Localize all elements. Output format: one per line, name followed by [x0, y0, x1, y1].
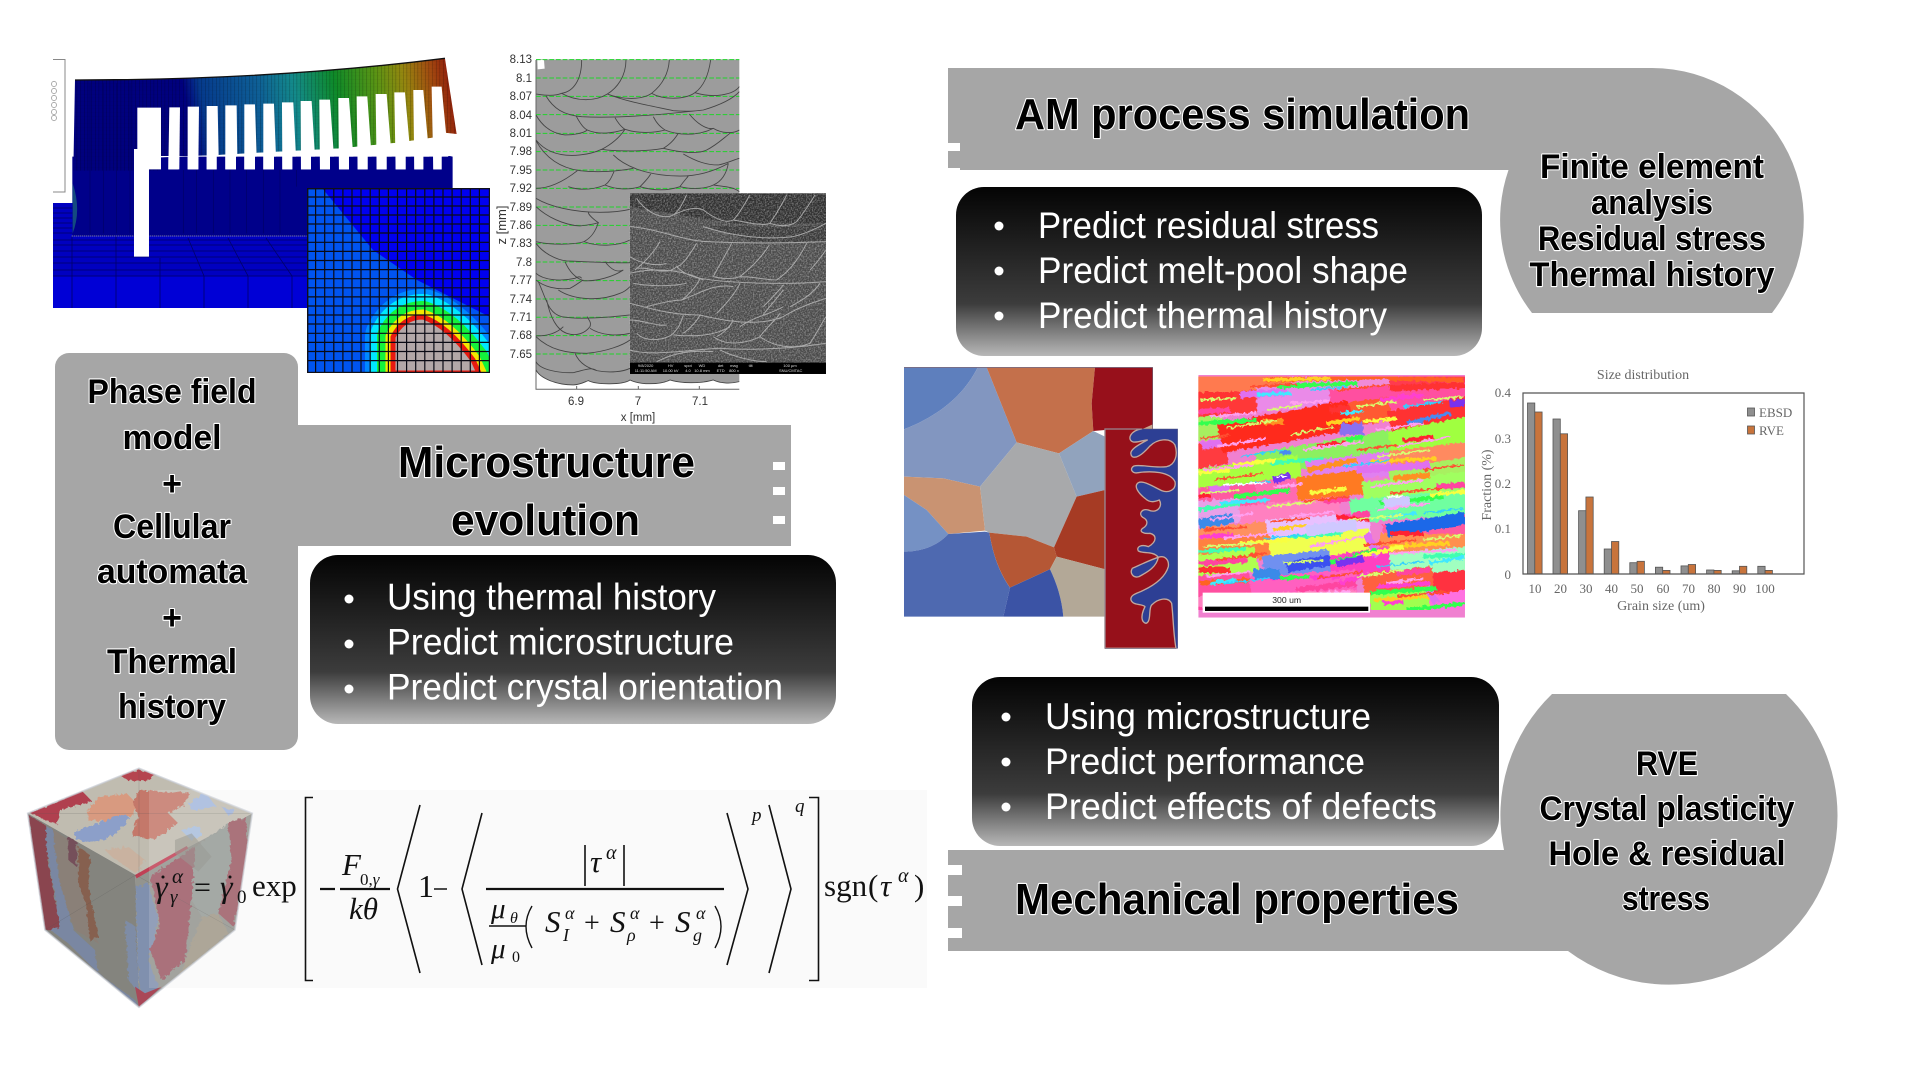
- axis titles: z [mm]: [494, 206, 509, 244]
- broad orientation regions: [1193, 378, 1470, 608]
- x axis labels: 100: [1755, 581, 1775, 596]
- x axis title: Grain size (um): [1617, 599, 1705, 614]
- chart title: Size distribution: [1597, 368, 1689, 383]
- SEM data bar: [630, 363, 826, 374]
- x axis labels: 10: [1528, 581, 1542, 596]
- equation: crystal plasticity flow rule: μ: [490, 893, 506, 925]
- axis titles: 7.1: [692, 396, 708, 408]
- SEM data bar: SNU/CMTAC: [779, 368, 802, 373]
- base plate: [53, 203, 309, 308]
- callout: AM process bullet list: [956, 187, 1482, 356]
- equation: crystal plasticity flow rule: +: [584, 908, 600, 939]
- icon: RVE cube: [28, 768, 252, 1007]
- topic list: Residual stress: [1538, 220, 1766, 258]
- callout: mechanical properties bullet list: Predict performance: [1045, 741, 1365, 782]
- axis tick labels: [510, 54, 533, 361]
- x axis labels: 90: [1733, 581, 1746, 596]
- legend: [1748, 405, 1792, 438]
- y axis labels: 0.1: [1495, 521, 1511, 536]
- x axis labels: 40: [1605, 581, 1618, 596]
- equation: crystal plasticity flow rule: S: [675, 904, 690, 939]
- equation: crystal plasticity flow rule: α: [172, 864, 184, 888]
- SEM data bar: spot: [684, 363, 693, 368]
- right face grains: [136, 817, 248, 1003]
- topic list: [1530, 148, 1775, 294]
- y axis title: Fraction (%): [1480, 449, 1495, 521]
- equation: crystal plasticity flow rule: α: [696, 903, 706, 923]
- equation: crystal plasticity flow rule: α: [898, 865, 909, 887]
- y axis labels: 0.3: [1495, 431, 1511, 446]
- chart: grain size distribution: [1480, 368, 1804, 614]
- left face grains: [28, 815, 139, 1007]
- x axis labels: 30: [1580, 581, 1592, 596]
- equation: crystal plasticity flow rule: 0,γ: [360, 870, 381, 889]
- panel: mechanical properties banner: [948, 694, 1838, 985]
- white slots: [134, 87, 459, 257]
- x axis labels: 50: [1630, 581, 1644, 596]
- axis tick labels: 7.92: [510, 183, 532, 195]
- axis tick labels: 8.07: [510, 91, 532, 103]
- SEM data bar: 11:11:50 AM: [635, 368, 657, 373]
- x axis labels: [1528, 581, 1775, 596]
- axis tick labels: 7.65: [510, 349, 532, 361]
- method list text: Thermal: [107, 643, 237, 681]
- equation: crystal plasticity flow rule: α: [606, 842, 617, 864]
- y axis labels: 0.2: [1495, 476, 1511, 491]
- axis titles: 7: [635, 396, 641, 408]
- SEM data bar: tilt: [749, 363, 754, 368]
- panel: AM process simulation banner: [948, 68, 1804, 313]
- heading: Mechanical properties: [1015, 875, 1459, 924]
- topic list: Finite element: [1540, 148, 1764, 186]
- callout: AM process bullet list: Predict residual stress: [1038, 205, 1379, 246]
- SEM data bar: det: [718, 363, 724, 368]
- equation: crystal plasticity flow rule: g: [693, 925, 702, 945]
- large brackets and chevrons: [306, 798, 818, 980]
- topic list: Hole & residual: [1548, 835, 1786, 873]
- SEM data bar: 100 µm: [783, 363, 797, 368]
- SEM data bar: 10.8 mm: [694, 368, 710, 373]
- equation: crystal plasticity flow rule: α: [565, 903, 575, 923]
- panel: EBSD orientation map: [1193, 375, 1470, 618]
- callout: mechanical properties bullet list: Using microstructure: [1045, 696, 1371, 737]
- callout: mechanical properties bullet list: Predict effects of defects: [1045, 786, 1437, 827]
- axis titles: 6.9: [568, 396, 584, 408]
- method list text: model: [122, 419, 222, 457]
- topic list: analysis: [1591, 184, 1713, 222]
- method list text: +: [162, 465, 182, 503]
- callout: AM process bullet list: Predict melt-pool shape: [1038, 250, 1408, 291]
- axis tick labels: 8.04: [510, 110, 533, 122]
- equation: crystal plasticity flow rule: 0: [512, 949, 520, 966]
- panel: dendrite phase field: [1105, 429, 1178, 648]
- equation: crystal plasticity flow rule: ρ: [626, 925, 636, 945]
- bars: [1528, 403, 1772, 574]
- equation: crystal plasticity flow rule: exp: [252, 868, 297, 903]
- panel: melt pool temperature contour: [307, 188, 490, 373]
- topic list: RVE: [1636, 745, 1698, 783]
- thin mixed streaks: [1203, 401, 1457, 597]
- equation: crystal plasticity flow rule: [155, 796, 924, 980]
- heading: microstructure evolution band: [290, 425, 791, 546]
- SEM data bar: WD: [699, 363, 705, 368]
- equation: crystal plasticity flow rule: +: [649, 908, 665, 939]
- topic list: Crystal plasticity: [1540, 790, 1795, 828]
- equation: crystal plasticity flow rule: I: [562, 925, 570, 945]
- legend: RVE: [1759, 423, 1784, 438]
- axis tick labels: 8.13: [510, 54, 532, 66]
- x axis labels: 70: [1682, 581, 1695, 596]
- callout: microstructure bullet list: [310, 555, 836, 724]
- equation: crystal plasticity flow rule: γ: [170, 887, 178, 908]
- equation: crystal plasticity flow rule: μ: [490, 933, 506, 965]
- interior defect lattice: [175, 833, 212, 872]
- x axis labels: 60: [1656, 581, 1670, 596]
- topic list: Thermal history: [1530, 256, 1775, 294]
- equation: crystal plasticity flow rule: S: [610, 904, 626, 939]
- melt pool plot: [536, 59, 826, 389]
- panel: finite element beam model: [52, 58, 459, 308]
- callout: AM process bullet list: Predict thermal history: [1038, 295, 1387, 336]
- callout: microstructure bullet list: Predict crystal orientation: [387, 666, 783, 708]
- callout: microstructure bullet list: Predict microstructure: [387, 622, 734, 662]
- SEM data bar: mag: [730, 363, 738, 368]
- equation: crystal plasticity flow rule: ): [914, 868, 924, 903]
- axis titles: [494, 206, 708, 424]
- heading: microstructure evolution band: Microstructure: [398, 438, 695, 487]
- method list text: automata: [97, 553, 248, 591]
- legend frame: [52, 60, 65, 192]
- method list text: history: [118, 688, 226, 726]
- method list text: Phase field: [88, 373, 256, 411]
- equation: crystal plasticity flow rule: p: [750, 805, 762, 826]
- equation: crystal plasticity flow rule: τ: [880, 868, 893, 903]
- heading: AM process simulation: [1015, 90, 1470, 139]
- equation: crystal plasticity flow rule: sgn: [824, 868, 868, 903]
- veil of equation panel over cube: [149, 790, 927, 988]
- equation: crystal plasticity flow rule: S: [545, 904, 560, 939]
- SEM data bar: 4.0: [685, 368, 692, 373]
- equation: crystal plasticity flow rule: F: [341, 847, 362, 882]
- SEM data bar: 800 x: [729, 368, 739, 373]
- x axis labels: 20: [1554, 581, 1567, 596]
- method list text: Cellular: [113, 508, 231, 546]
- SEM micrograph: [630, 193, 826, 374]
- legend: EBSD: [1759, 405, 1792, 420]
- axis tick labels: 7.77: [510, 275, 532, 287]
- panel: phase field and cellular automata inputs: [55, 353, 791, 750]
- axis tick labels: 7.95: [510, 165, 532, 177]
- equation: crystal plasticity flow rule: θ: [510, 910, 518, 927]
- axis titles: x [mm]: [621, 412, 655, 424]
- equation: crystal plasticity flow rule: (: [868, 868, 878, 903]
- axis tick labels: 7.98: [510, 146, 532, 158]
- equation: crystal plasticity flow rule: 0: [237, 887, 246, 908]
- axis tick labels: 8.01: [510, 128, 532, 140]
- axis tick labels: 7.86: [510, 220, 532, 232]
- axis tick labels: 7.74: [510, 294, 533, 306]
- model in deformed coordinates: [72, 58, 459, 257]
- axis tick labels: 7.68: [510, 330, 532, 342]
- topic list: stress: [1622, 880, 1710, 918]
- axis tick labels: 7.8: [516, 257, 532, 269]
- axis tick labels: 7.83: [510, 238, 532, 250]
- fine grain streaks: [1198, 385, 1465, 570]
- axis tick labels: 7.89: [510, 202, 532, 214]
- axis tick labels: 8.1: [516, 73, 532, 85]
- SEM data bar: 10.00 kV: [663, 368, 679, 373]
- equation: crystal plasticity flow rule: α: [630, 903, 640, 923]
- panel: grain structure phase field: [904, 367, 1153, 617]
- SEM data bar: 9/8/2020: [638, 363, 654, 368]
- equation: crystal plasticity flow rule: kθ: [349, 891, 378, 926]
- y axis labels: 0: [1504, 567, 1511, 582]
- x axis labels: 80: [1708, 581, 1720, 596]
- topic list: [1540, 745, 1795, 918]
- equation: crystal plasticity flow rule: =: [194, 871, 211, 904]
- panel: equation background: [149, 790, 927, 988]
- equation: crystal plasticity flow rule: γ: [155, 868, 169, 904]
- y axis labels: [1495, 385, 1512, 582]
- equation: crystal plasticity flow rule: 1: [418, 868, 434, 904]
- top face grains: [30, 770, 236, 873]
- equation: crystal plasticity flow rule: τ: [590, 844, 603, 879]
- scale bar: 300 um: [1272, 595, 1301, 605]
- SEM data bar: ETD: [717, 368, 725, 373]
- heading: microstructure evolution band: evolution: [451, 496, 640, 545]
- scale bar: [1203, 593, 1370, 613]
- chart: scan track melt pool simulation: [494, 54, 826, 424]
- equation: crystal plasticity flow rule: γ: [220, 868, 234, 904]
- equation: crystal plasticity flow rule: q: [795, 796, 805, 817]
- SEM data bar: HV: [668, 363, 674, 368]
- method list text: [88, 373, 256, 726]
- y axis labels: 0.4: [1495, 385, 1512, 400]
- callout: microstructure bullet list: Using thermal history: [387, 576, 716, 618]
- callout: mechanical properties bullet list: [972, 677, 1499, 846]
- axis tick labels: 7.71: [510, 312, 532, 324]
- method list text: +: [162, 599, 182, 637]
